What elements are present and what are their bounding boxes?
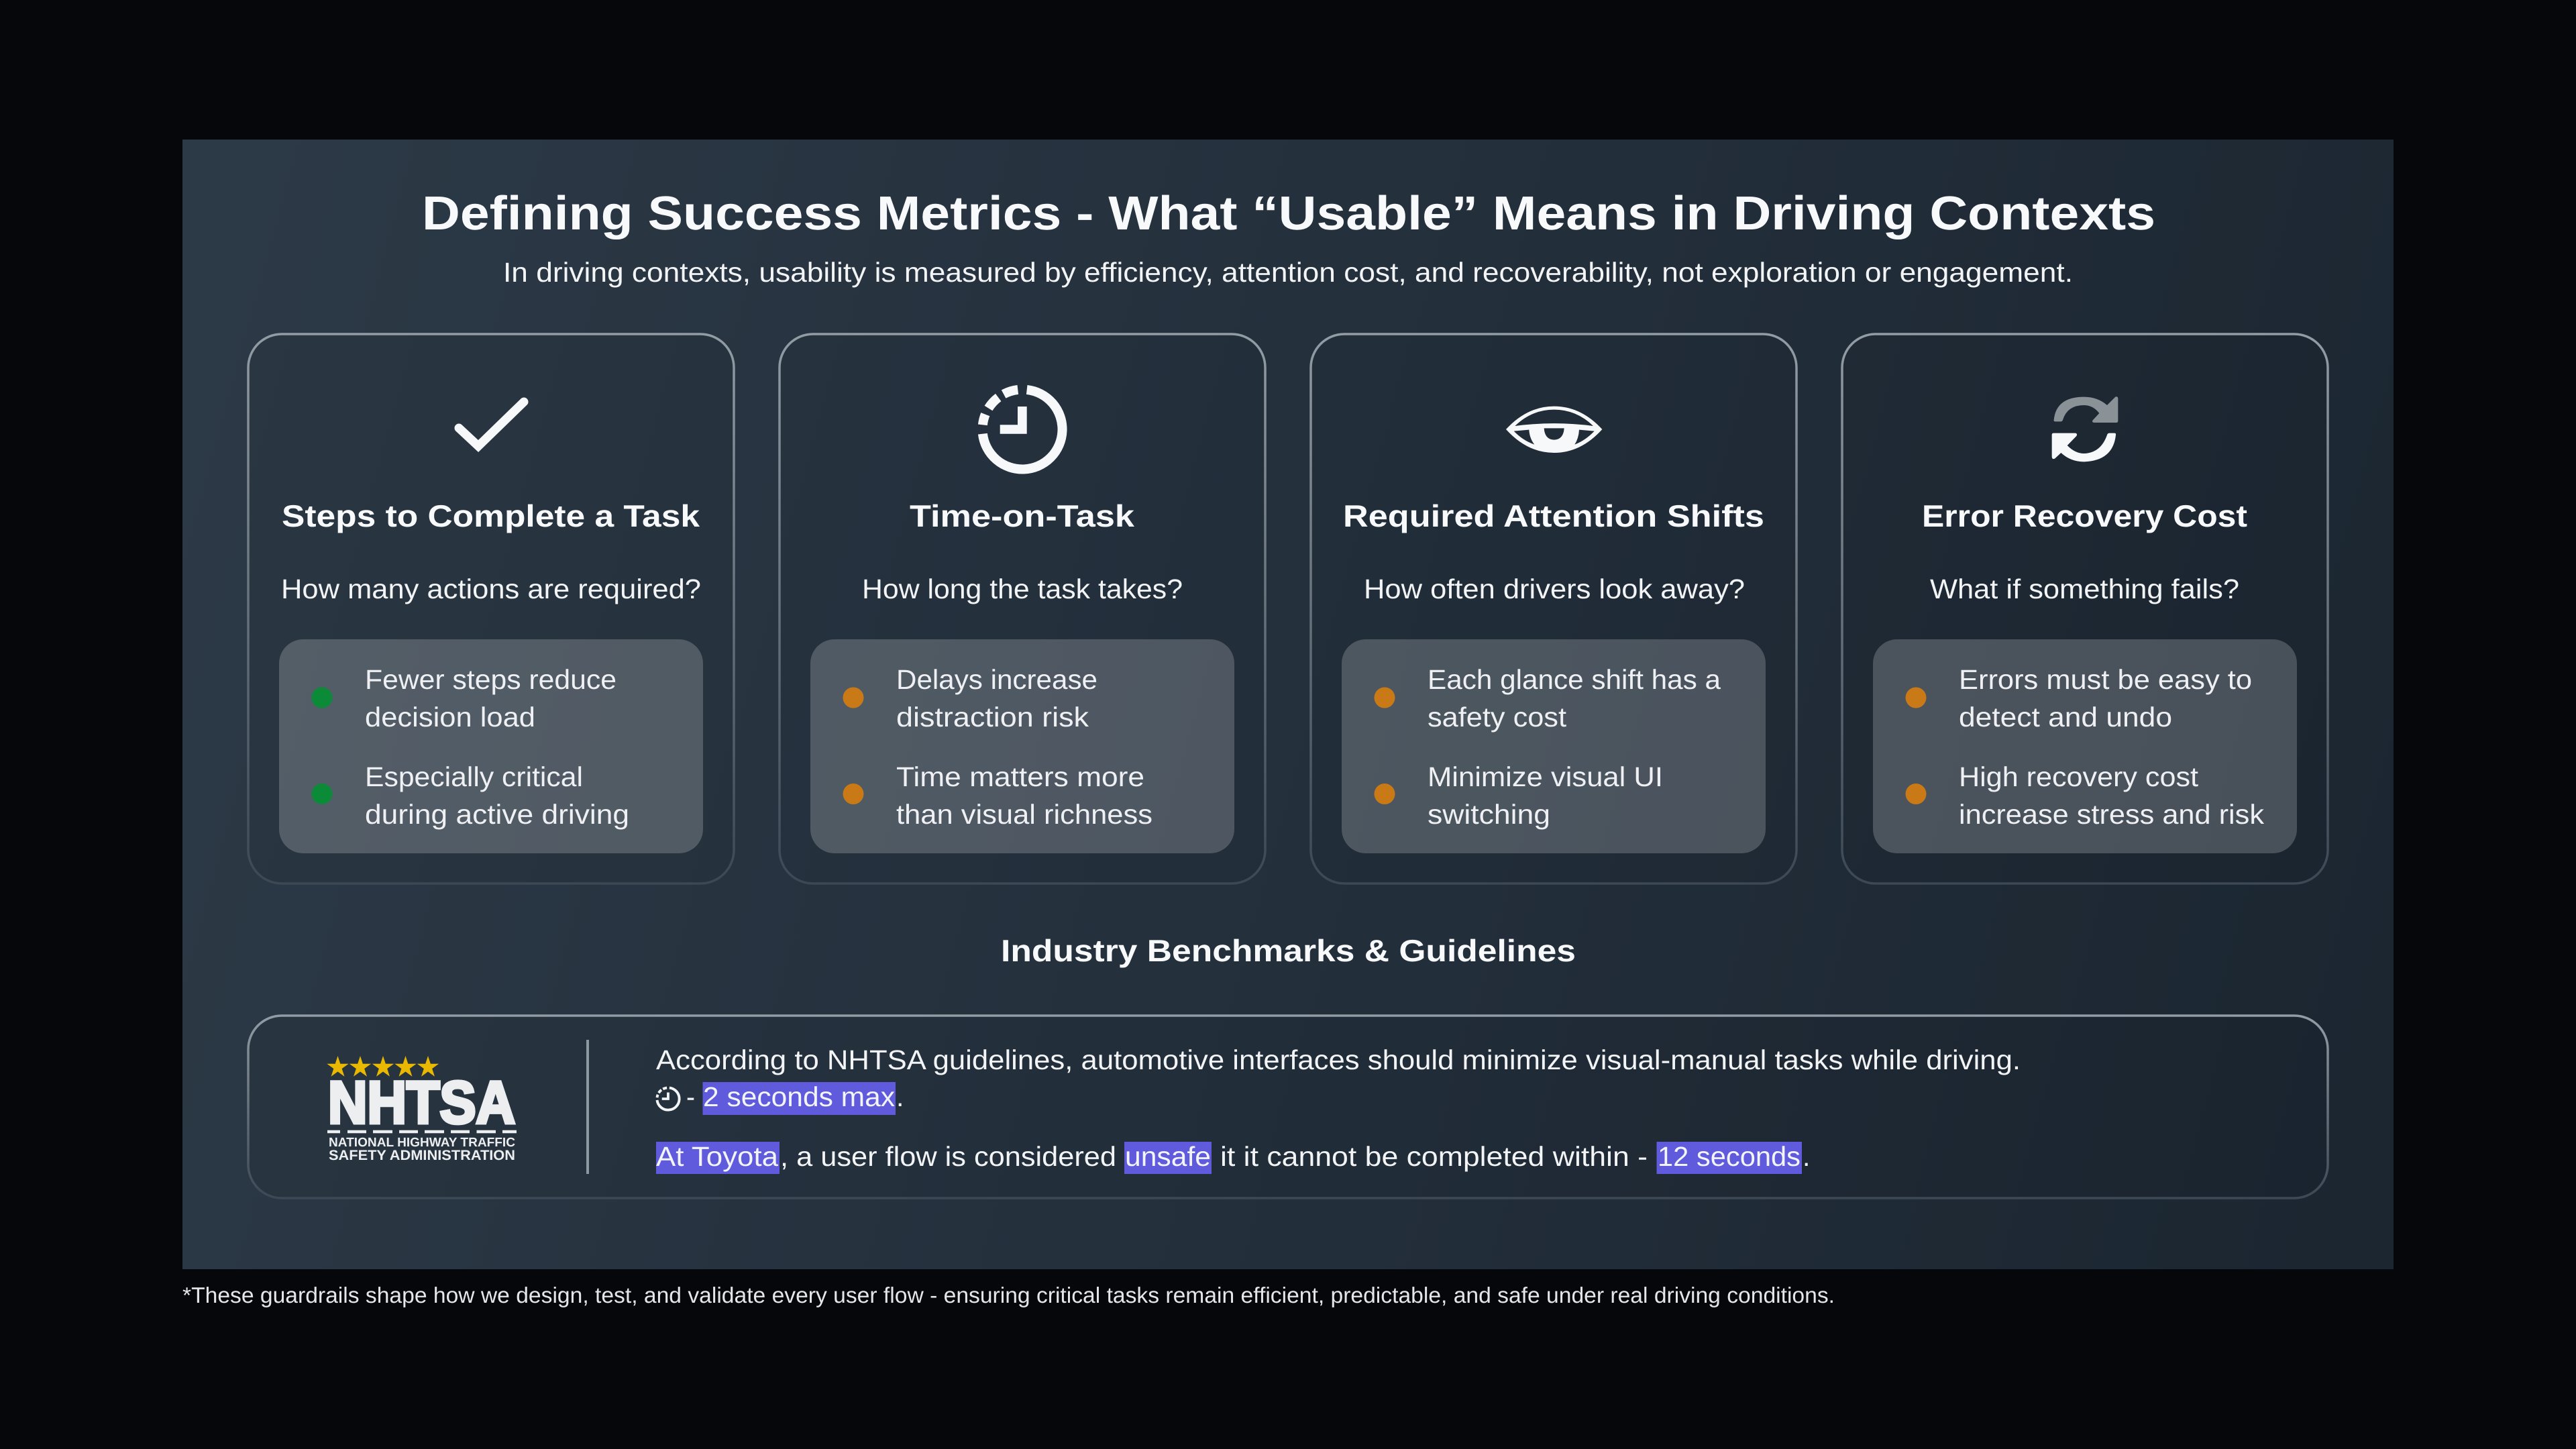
bullet box [1342, 639, 1766, 853]
bullet text: distraction risk [896, 702, 1089, 733]
highlighted text: At Toyota [656, 1141, 778, 1172]
card question: How many actions are required? [281, 574, 701, 604]
logo agency line 2: SAFETY ADMINISTRATION [329, 1148, 515, 1163]
logo stars [327, 1056, 439, 1077]
bullet text: safety cost [1428, 702, 1567, 733]
bullet dot [1905, 784, 1927, 804]
bullet text: Especially critical [365, 761, 583, 792]
period: . [896, 1081, 904, 1112]
bullet text: switching [1428, 799, 1550, 830]
footnote: *These guardrails shape how we design, test, and validate every user flow - ensuring critical tasks remain efficient, predictable, and safe under real driving conditions. [182, 1283, 1835, 1307]
bullet box [279, 639, 703, 853]
bullet dot [1374, 784, 1395, 804]
period: . [1803, 1141, 1810, 1172]
bullet text: Delays increase [896, 664, 1097, 695]
card heading: Steps to Complete a Task [282, 498, 700, 533]
bullet text: Time matters more [896, 761, 1144, 792]
icon: timer clock [983, 390, 1063, 470]
icon: check mark [459, 402, 524, 446]
bullet text: Each glance shift has a [1428, 664, 1721, 695]
card: error recovery cost [1842, 334, 2328, 883]
bullet dot [843, 687, 864, 708]
toyota rule line [656, 1141, 1810, 1174]
icon: eye [1506, 407, 1602, 453]
bullet text: High recovery cost [1959, 761, 2199, 792]
bullet text: than visual richness [896, 799, 1152, 830]
divider [586, 1040, 589, 1174]
bullet text: increase stress and risk [1959, 799, 2265, 830]
logo road dashes [327, 1130, 517, 1133]
highlighted text: 2 seconds max [703, 1081, 896, 1112]
card heading: Error Recovery Cost [1922, 498, 2247, 533]
highlight: 12 seconds [1657, 1142, 1802, 1174]
logo wordmark: NHTSA [328, 1069, 515, 1136]
card heading: Required Attention Shifts [1343, 498, 1764, 533]
icon: small timer [657, 1088, 680, 1110]
card question: What if something fails? [1930, 574, 2239, 604]
bullet dot [1374, 687, 1395, 708]
highlighted text: 12 seconds [1658, 1141, 1801, 1172]
bullet text: Minimize visual UI [1428, 761, 1663, 792]
highlight: unsafe [1124, 1142, 1212, 1174]
highlighted text: unsafe [1125, 1141, 1211, 1172]
bullet text: decision load [365, 702, 535, 733]
bullet box [1873, 639, 2297, 853]
logo: NHTSA [327, 1056, 517, 1163]
bullet dot [311, 784, 333, 804]
bullet box [810, 639, 1234, 853]
guideline limit line [657, 1081, 904, 1115]
card: required attention shifts [1311, 334, 1796, 883]
bullet dot [311, 687, 333, 708]
highlight: 2 seconds max [703, 1082, 896, 1115]
sentence part: it it cannot be completed within - [1220, 1141, 1648, 1172]
dash: - [686, 1081, 695, 1112]
logo agency line 1: NATIONAL HIGHWAY TRAFFIC [329, 1136, 515, 1150]
bullet text: Errors must be easy to [1959, 664, 2252, 695]
highlight: at toyota [656, 1142, 780, 1174]
card: steps to complete a task [248, 334, 734, 883]
card: time-on-task [780, 334, 1265, 883]
bullet text: detect and undo [1959, 702, 2172, 733]
bullet dot [843, 784, 864, 804]
subtitle: In driving contexts, usability is measured by efficiency, attention cost, and recoverability, not exploration or engagement. [503, 257, 2073, 288]
card heading: Time-on-Task [910, 498, 1134, 533]
section heading: Industry Benchmarks & Guidelines [1001, 933, 1576, 968]
title: Defining Success Metrics - What “Usable” Means in Driving Contexts [422, 187, 2155, 240]
card question: How long the task takes? [862, 574, 1183, 604]
guideline sentence: According to NHTSA guidelines, automotive interfaces should minimize visual-manual tasks while driving. [656, 1044, 2021, 1075]
bullet dot [1905, 687, 1927, 708]
card question: How often drivers look away? [1364, 574, 1745, 604]
bullet text: Fewer steps reduce [365, 664, 616, 695]
icon: refresh arrows [2052, 396, 2118, 462]
bullet text: during active driving [365, 799, 629, 830]
sentence part: , a user flow is considered [780, 1141, 1116, 1172]
benchmarks panel [248, 1016, 2328, 1198]
main panel background [182, 140, 2394, 1269]
